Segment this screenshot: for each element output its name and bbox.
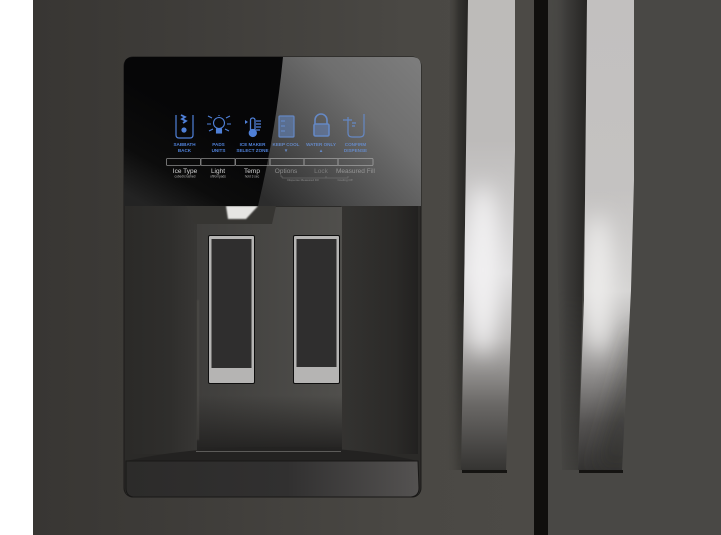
button label: options: Options bbox=[275, 168, 298, 175]
button label: lock: Lock bbox=[314, 168, 329, 175]
water paddle bbox=[208, 235, 255, 384]
control display: off/on/pads bbox=[210, 174, 226, 178]
label: water only: WATER ONLY bbox=[306, 142, 336, 147]
dispenser panel bbox=[124, 57, 421, 497]
door gap bbox=[534, 0, 548, 535]
button sublabels bbox=[280, 176, 353, 182]
control display: SELECT ZONE bbox=[236, 148, 269, 153]
label: ice maker select zone: ICE MAKER bbox=[240, 142, 266, 147]
control display: cubed/crushed bbox=[175, 174, 196, 178]
button label: light: Light bbox=[211, 168, 225, 175]
handle shadow bbox=[563, 0, 587, 470]
label: confirm dispense: CONFIRM bbox=[345, 142, 366, 147]
button strip bbox=[166, 158, 373, 166]
left door bbox=[33, 0, 534, 535]
button label: temp: Temp bbox=[244, 168, 260, 175]
control display: ▲ bbox=[319, 148, 323, 153]
button sublabels: Dispense Measured Fill bbox=[287, 178, 319, 182]
center column bbox=[197, 207, 342, 447]
glass reflection bbox=[124, 57, 283, 206]
control display bbox=[124, 57, 421, 206]
label: pads units: PADS bbox=[212, 142, 225, 147]
control display: ▼ bbox=[284, 148, 288, 153]
handle: right door bbox=[563, 0, 634, 473]
ice paddle bbox=[293, 235, 340, 384]
label: sabbath back: SABBATH bbox=[173, 142, 196, 147]
recess interior bbox=[126, 204, 419, 494]
drip tray bbox=[126, 447, 419, 497]
icon: light bbox=[207, 115, 231, 133]
control display: UNITS bbox=[212, 148, 225, 153]
icon: padlock bbox=[314, 114, 329, 136]
handle shadow bbox=[452, 0, 468, 470]
icon: thermometer bbox=[245, 118, 261, 136]
icon: sabbath bbox=[176, 115, 193, 138]
white page margin bbox=[0, 0, 33, 535]
handle bar bbox=[461, 0, 515, 470]
control display: hold 3 sec bbox=[245, 174, 260, 178]
right door bbox=[548, 0, 721, 535]
button label: ice type: Ice Type bbox=[173, 168, 198, 175]
control display: DISPENSE bbox=[344, 148, 367, 153]
handle: left door bbox=[446, 0, 515, 473]
control display: BACK bbox=[178, 148, 192, 153]
handle bar bbox=[578, 0, 634, 470]
icon: measured container bbox=[343, 114, 364, 137]
button label: measured fill: Measured Fill bbox=[336, 168, 376, 175]
button sublabels: Cooling Off bbox=[338, 178, 353, 182]
label: keep cool: KEEP COOL bbox=[273, 142, 300, 147]
icon: door grid bbox=[279, 116, 294, 137]
ice chute bbox=[186, 206, 276, 224]
